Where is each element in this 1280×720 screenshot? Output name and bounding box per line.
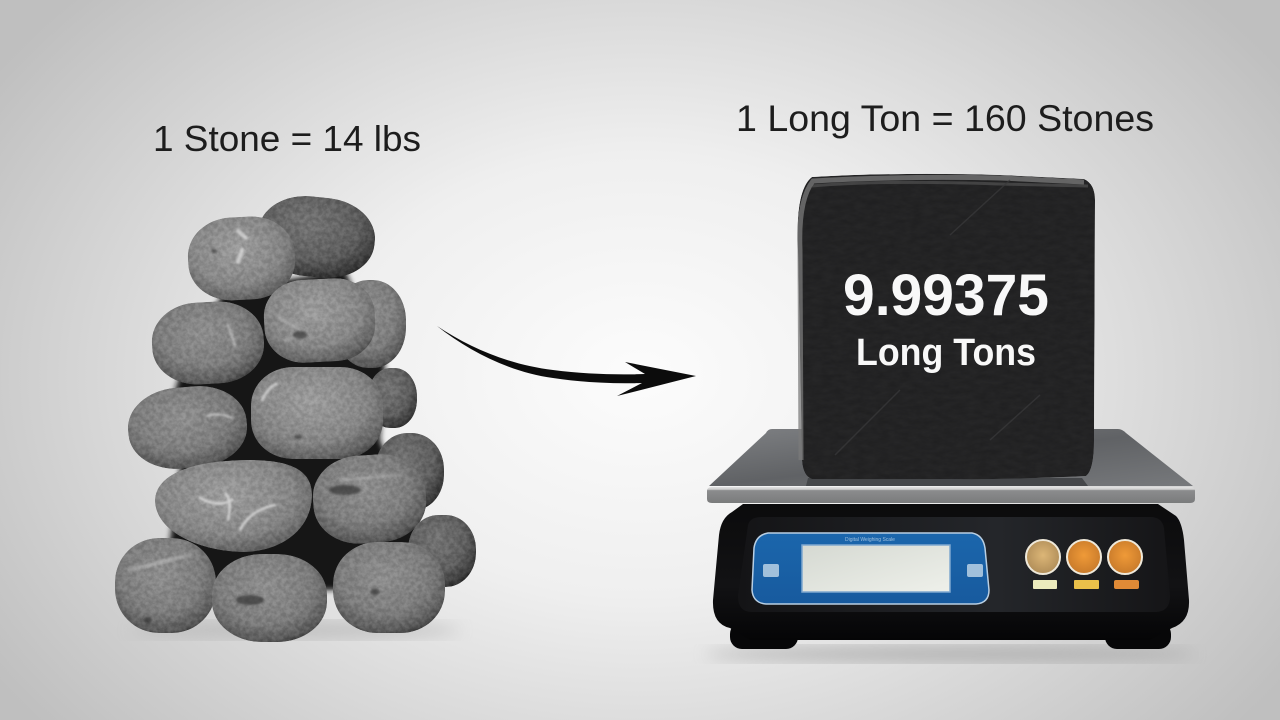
arrow [437, 326, 696, 396]
cube unit: Long Tons [856, 332, 1036, 374]
cube value: 9.99375 [843, 263, 1049, 328]
scale control panel [738, 517, 1170, 612]
stone cube [798, 174, 1095, 486]
scale platform [709, 429, 1193, 486]
scale body [713, 504, 1189, 640]
stone highlights [130, 231, 400, 570]
scale display [752, 533, 989, 604]
label: 1 Long Ton = 160 Stones: 1 Long Ton = 160 Stones [736, 98, 1154, 139]
stone dark pits [144, 249, 380, 623]
label: 1 Stone = 14 lbs: 1 Stone = 14 lbs [153, 118, 421, 159]
scale [705, 429, 1195, 662]
scale buttons [1026, 540, 1142, 589]
cube rough edge [800, 177, 1084, 460]
icon: pile of stones [115, 191, 476, 642]
scale feet [730, 622, 1171, 649]
scale display: Digital Weighing Scale [845, 537, 895, 543]
